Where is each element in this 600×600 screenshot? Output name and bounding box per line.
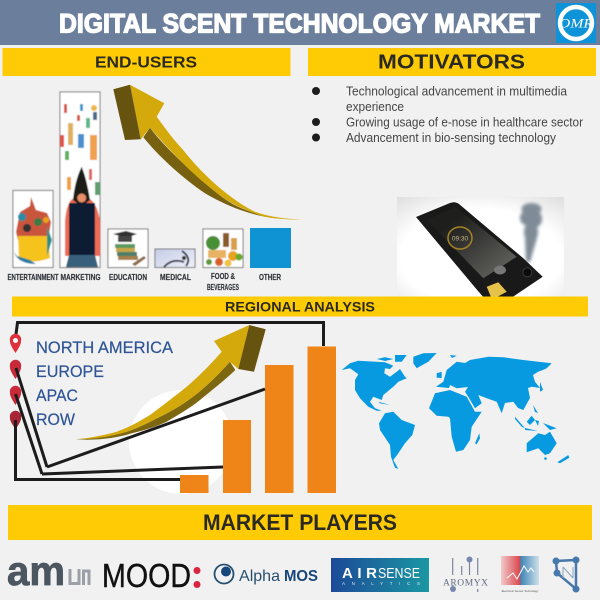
heading: motivators: MOTIVATORS	[378, 50, 525, 74]
motivators list: Growing usage of e-nose in healthcare sector	[346, 116, 583, 130]
regional arrow	[76, 325, 266, 440]
logo: MOOD: MOOD	[102, 557, 191, 594]
logo: Alpha MOS: Alpha	[239, 568, 280, 585]
logo: ams: am	[7, 548, 65, 594]
tile: education	[108, 229, 148, 268]
tile: food and beverages	[203, 229, 243, 268]
end-user labels: BEVERAGES	[207, 282, 239, 292]
region labels: NORTH AMERICA	[36, 339, 173, 357]
white circle	[129, 390, 233, 494]
end-user labels: EDUCATION	[109, 272, 147, 282]
end-user labels: OTHER	[259, 272, 281, 282]
tile: medical	[155, 249, 195, 268]
logo: Airsense Analytics: ANALYTICS	[342, 581, 420, 586]
end-users arrow	[113, 85, 302, 219]
motivators list: experience	[346, 100, 404, 114]
end-user labels: ENTERTAINMENT	[8, 272, 59, 282]
yellow chip	[487, 282, 507, 297]
heading: motivators	[308, 48, 596, 76]
heading: end-users	[2, 48, 290, 76]
end-user labels	[8, 271, 281, 292]
region labels: EUROPE	[36, 363, 104, 381]
motivators list	[312, 84, 583, 145]
logo: OMR	[556, 3, 596, 43]
smoke	[520, 203, 542, 262]
connector lines	[15, 322, 324, 480]
map pins	[10, 334, 47, 474]
end-user labels: MEDICAL	[160, 272, 191, 282]
region labels	[36, 339, 173, 429]
logo: Airsense Analytics	[331, 558, 429, 592]
photo: scent phone	[397, 197, 564, 297]
photo: scent phone: 09:30	[452, 236, 469, 242]
logo: Airsense Analytics: SENSE	[378, 565, 420, 582]
end-user labels: MARKETING	[60, 272, 101, 282]
logo: Aromyx: AROMYX	[443, 578, 488, 588]
logo: Airsense Analytics: AIR	[342, 565, 377, 582]
heading: market players	[8, 505, 592, 540]
logo: electronic sensor technology	[501, 556, 539, 593]
tile: marketing	[60, 92, 100, 268]
world map	[342, 353, 569, 469]
logo: Alpha MOS: MOS	[284, 568, 318, 585]
header banner	[0, 0, 600, 45]
heading: market players: MARKET PLAYERS	[203, 510, 397, 535]
logo: OMR: OMR	[559, 16, 593, 30]
region labels: APAC	[36, 387, 78, 405]
motivators list: Advancement in bio-sensing technology	[346, 131, 557, 145]
region labels: ROW	[36, 411, 75, 429]
phone body	[416, 202, 543, 297]
phone screen	[427, 207, 517, 278]
heading: regional analysis: REGIONAL ANALYSIS	[225, 298, 375, 314]
heading: end-users: END-USERS	[95, 54, 197, 72]
logo: N network	[552, 556, 580, 592]
heading: regional analysis	[12, 296, 588, 316]
end-user labels: FOOD &	[211, 271, 235, 281]
logo: Aromyx	[443, 556, 488, 592]
tile: other	[250, 228, 291, 268]
motivators list: Technological advancement in multimedia	[346, 84, 567, 98]
bar chart	[180, 346, 336, 493]
tile: entertainment	[13, 190, 53, 268]
logo: Alpha MOS	[214, 564, 318, 585]
logo: electronic sensor technology: Electronic Sensor Technology	[502, 589, 539, 593]
title: DIGITAL SCENT TECHNOLOGY MARKET	[59, 8, 540, 38]
